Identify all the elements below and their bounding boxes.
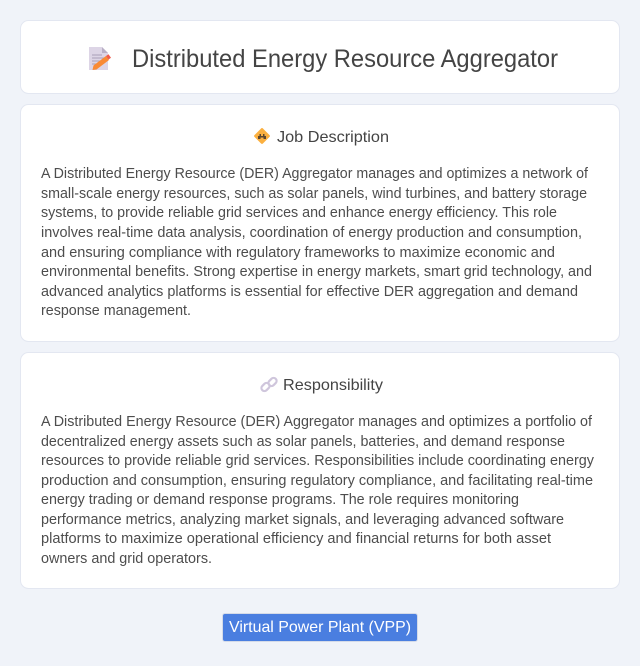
panel: job description: [20, 104, 620, 342]
text block: responsibility body: platforms to maximize operational efficiency and financial returns for both asset: [41, 531, 551, 547]
text block: responsibility body: energy trading or demand response programs. The role requires monitoring: [41, 492, 519, 508]
text block: job description body: advanced analytics platforms is essential for effective DER aggregation and demand: [41, 284, 578, 300]
text block: responsibility body: performance metrics, analyzing market signals, and leveraging advanced software: [41, 512, 564, 528]
heading: job description: Job Description: [277, 129, 389, 146]
text block: responsibility body: resources to provide reliable grid services. Responsibilities include coordinating energy: [41, 453, 595, 469]
text block: responsibility body: owners and grid operators.: [41, 551, 212, 567]
text block: job description body: [41, 166, 592, 319]
text block: job description body: and ensuring compliance with regulatory frameworks to maximize economic and: [41, 245, 555, 261]
icon: link: [260, 377, 278, 392]
panel: title card: [20, 20, 620, 94]
text block: job description body: small-scale energy resources, such as solar panels, wind turbines, and battery storage: [41, 186, 587, 202]
text block: job description body: response management.: [41, 303, 191, 319]
title: Distributed Energy Resource Aggregator: [132, 45, 558, 73]
icon: orange diamond sign: [254, 128, 270, 144]
text block: responsibility body: decentralized energy assets such as solar panels, batteries, and demand response: [41, 434, 565, 450]
text block: job description body: systems, to provide reliable grid services and enhance energy efficiency. This role: [41, 205, 557, 221]
panel: responsibility: [20, 352, 620, 588]
text block: job description body: A Distributed Energy Resource (DER) Aggregator manages and optimizes a network of: [41, 166, 589, 182]
text block: responsibility body: [41, 414, 595, 567]
text block: job description body: environmental benefits. Strong expertise in energy markets, smart grid technology, and: [41, 264, 592, 280]
text block: responsibility body: A Distributed Energy Resource (DER) Aggregator manages and optimizes a portfolio of: [41, 414, 593, 430]
button: virtual power plant: Virtual Power Plant (VPP): [229, 619, 411, 636]
text block: responsibility body: production and consumption, ensuring regulatory compliance, and facilitating real-time: [41, 473, 593, 489]
text block: job description body: involves real-time data analysis, coordination of energy production and consumption,: [41, 225, 582, 241]
button: virtual power plant: [222, 614, 418, 642]
icon: memo with pencil: [89, 47, 111, 70]
heading: responsibility: Responsibility: [283, 377, 383, 394]
